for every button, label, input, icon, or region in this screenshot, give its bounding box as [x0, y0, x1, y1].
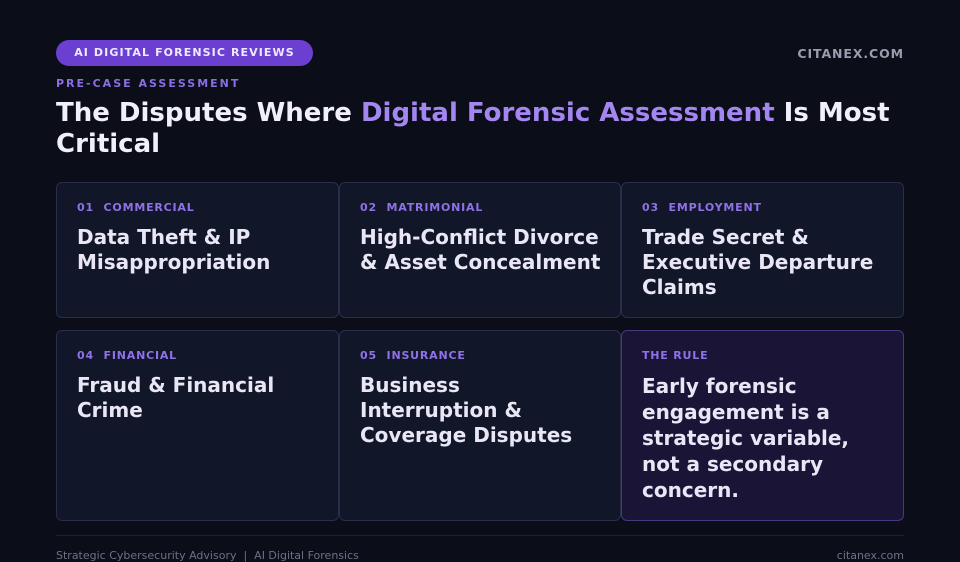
site name: CITANEX.COM: [797, 46, 904, 61]
panel: the rule: Early forensic: [642, 374, 797, 398]
panel: the rule: [621, 330, 904, 521]
panel: financial: 04 FINANCIAL: [77, 349, 177, 362]
panel: commercial: 01 COMMERCIAL: [77, 201, 195, 214]
panel: matrimonial: & Asset Concealment: [360, 250, 600, 274]
title: The Disputes Where Digital Forensic Assessment Is Most Critical: [56, 98, 890, 159]
panel: financial: Fraud & Financial: [77, 373, 274, 397]
panel: matrimonial: 02 MATRIMONIAL: [360, 201, 483, 214]
panel: insurance: Coverage Disputes: [360, 423, 572, 447]
panel: matrimonial: [339, 182, 621, 318]
panel: employment: Executive Departure: [642, 250, 873, 274]
kicker: PRE-CASE ASSESSMENT: [56, 77, 240, 90]
panel: the rule: not a secondary: [642, 452, 823, 476]
panel: insurance: Business: [360, 373, 460, 397]
panel: insurance: [339, 330, 621, 521]
panel: financial: Crime: [77, 398, 143, 422]
footer right: citanex.com: [837, 549, 904, 562]
footer left: Strategic Cybersecurity Advisory | AI Digital Forensics: [56, 549, 359, 562]
panel: employment: Trade Secret &: [642, 225, 809, 249]
panel: commercial: Misappropriation: [77, 250, 270, 274]
badge pill: [56, 40, 313, 66]
panel: financial: [56, 330, 339, 521]
panel: the rule: strategic variable,: [642, 426, 849, 450]
panel: matrimonial: High-Conflict Divorce: [360, 225, 599, 249]
panel: the rule: THE RULE: [642, 349, 708, 362]
panel: commercial: Data Theft & IP: [77, 225, 250, 249]
panel: the rule: engagement is a: [642, 400, 830, 424]
panel: insurance: 05 INSURANCE: [360, 349, 466, 362]
panel: employment: 03 EMPLOYMENT: [642, 201, 762, 214]
panel: commercial: [56, 182, 339, 318]
panel: employment: [621, 182, 904, 318]
panel: employment: Claims: [642, 275, 717, 299]
panel: the rule: concern.: [642, 478, 739, 502]
panel: insurance: Interruption &: [360, 398, 522, 422]
badge pill: AI DIGITAL FORENSIC REVIEWS: [74, 46, 295, 59]
